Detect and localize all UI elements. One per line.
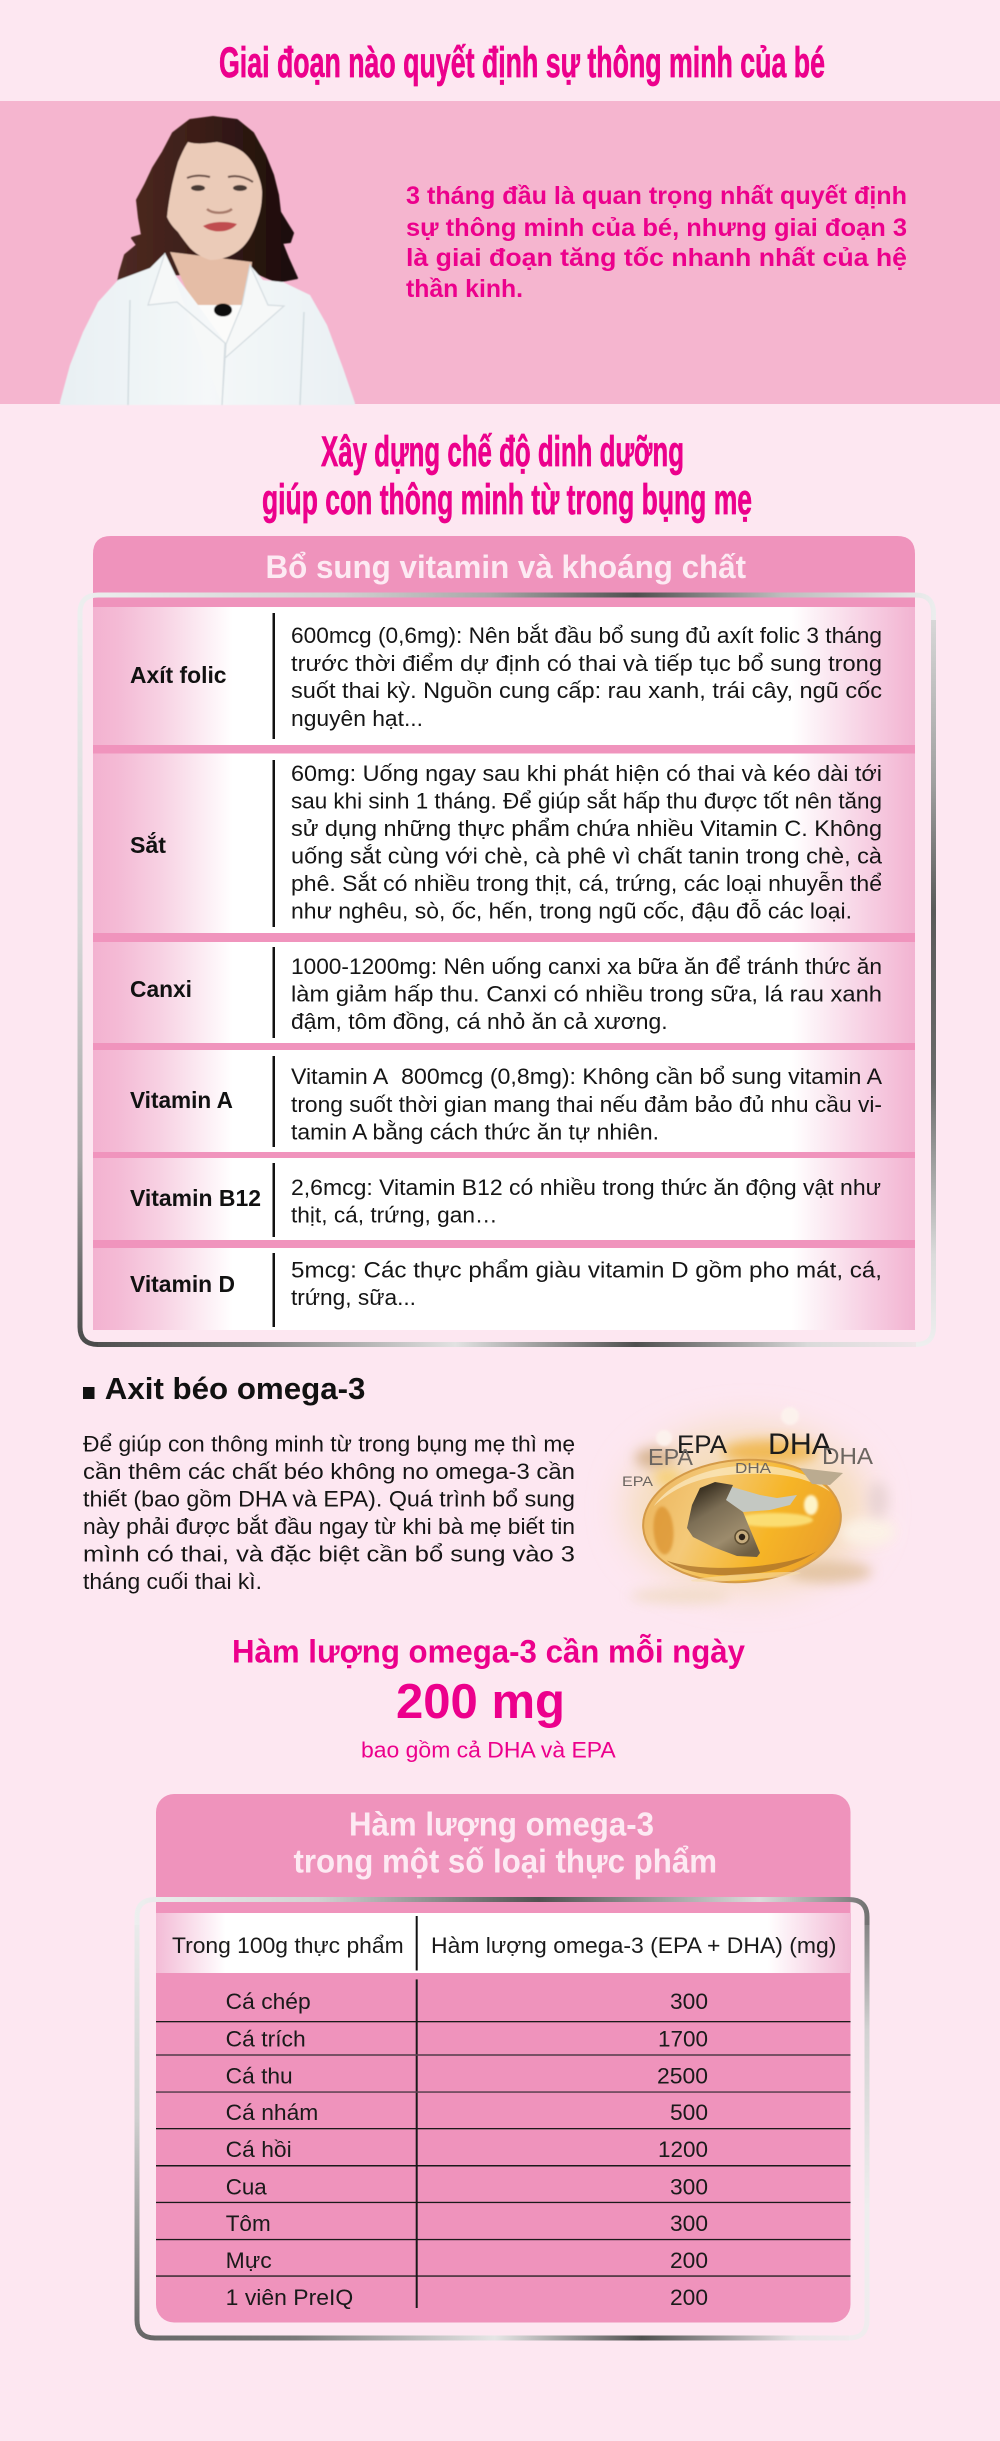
bullet square <box>83 1387 94 1399</box>
image: fish oil capsule with EPA and DHA: DHA <box>735 1460 771 1477</box>
row: Cá nhám <box>226 2100 708 2125</box>
table rows background <box>93 607 915 1330</box>
row: Axít folic: suốt thai kỳ. Nguồn cung cấp: rau xanh, trái cây, ngũ cốc <box>291 678 882 703</box>
photo: doctor in white coat <box>60 117 355 405</box>
row: Sắt: phê. Sắt có nhiều trong thịt, cá, trứng, các loại nhuyễn thể <box>291 871 882 896</box>
row: Canxi: đậm, tôm đồng, cá nhỏ ăn cả xương. <box>291 1009 668 1034</box>
row: Vitamin B12: 2,6mcg: Vitamin B12 có nhiều trong thức ăn động vật như <box>291 1175 881 1200</box>
row: Canxi: 1000-1200mg: Nên uống canxi xa bữa ăn để tránh thức ăn <box>291 954 882 979</box>
image: fish oil capsule with EPA and DHA <box>622 1407 896 1604</box>
table card and title <box>156 1794 850 2322</box>
callout: daily omega-3 requirement <box>232 1634 745 1763</box>
row: Vitamin A: tamin A bằng cách thức ăn tự nhiên. <box>291 1120 659 1145</box>
row: Canxi: Canxi <box>130 976 192 1002</box>
row: 1 viên PreIQ <box>226 2285 708 2310</box>
table column header <box>156 1913 851 1973</box>
row: Mực: 200 <box>670 2248 708 2273</box>
row: Vitamin D: Vitamin D <box>130 1271 235 1297</box>
omega paragraph <box>83 1432 575 1594</box>
row: Vitamin A: Vitamin A 800mcg (0,8mg): Không cần bổ sung vitamin A <box>291 1064 882 1089</box>
row: Cá thu <box>226 2064 708 2088</box>
row: Axít folic: 600mcg (0,6mg): Nên bắt đầu bổ sung đủ axít folic 3 tháng <box>291 623 882 648</box>
callout: daily omega-3 requirement: Hàm lượng omega-3 cần mỗi ngày <box>232 1634 745 1670</box>
omega paragraph: mình có thai, và đặc biệt cần bổ sung vào 3 <box>83 1542 575 1567</box>
omega paragraph: tháng cuối thai kì. <box>83 1569 262 1594</box>
row: Sắt: như nghêu, sò, ốc, hến, trong ngũ cốc, đậu đỗ các loại. <box>291 899 852 924</box>
callout: daily omega-3 requirement: bao gồm cả DHA và EPA <box>361 1738 616 1763</box>
row: Cá hồi: Cá hồi <box>226 2137 292 2162</box>
row: Cá thu: 2500 <box>657 2064 708 2088</box>
row: Vitamin B12: Vitamin B12 <box>130 1185 261 1211</box>
section: omega-3 fatty acid <box>83 1371 896 1604</box>
row: Sắt: uống sắt cùng với chè, cà phê vì chất tanin trong chè, cà <box>291 844 883 869</box>
image: fish oil capsule with EPA and DHA: EPA <box>622 1473 654 1489</box>
image: fish oil capsule with EPA and DHA: DHA <box>768 1428 832 1461</box>
quote text: sự thông minh của bé, nhưng giai đoạn 3 <box>406 214 907 242</box>
row: Cá trích: 1700 <box>658 2026 708 2051</box>
row: Sắt: Sắt <box>130 831 166 858</box>
image: fish oil capsule with EPA and DHA: EPA <box>648 1444 694 1470</box>
panel: vitamins and minerals table <box>80 536 934 1344</box>
row: Vitamin A: Vitamin A <box>130 1087 233 1113</box>
row: Cá chép <box>226 1989 708 2014</box>
table column header: Hàm lượng omega-3 (EPA + DHA) (mg) <box>431 1933 836 1958</box>
row: 1 viên PreIQ: 200 <box>670 2285 708 2310</box>
row: Axít folic: Axít folic <box>130 662 227 688</box>
table card and title: Hàm lượng omega-3 <box>349 1806 654 1843</box>
row: Cá hồi: 1200 <box>658 2137 708 2162</box>
row: Cá trích: Cá trích <box>226 2026 306 2051</box>
row: Sắt: sau khi sinh 1 tháng. Để giúp sắt hấp thu được tốt nên tăng <box>291 789 882 814</box>
row: Cua: Cua <box>226 2174 267 2199</box>
row: Vitamin D <box>130 1253 882 1327</box>
row: Vitamin D: 5mcg: Các thực phẩm giàu vitamin D gồm pho mát, cá, <box>291 1258 882 1283</box>
heading: nutrition plan <box>262 428 752 524</box>
table header: Bổ sung vitamin và khoáng chất <box>266 549 746 585</box>
omega paragraph: cần thêm các chất béo không no omega-3 cần <box>83 1459 575 1484</box>
row: Cua: 300 <box>670 2174 708 2199</box>
callout: daily omega-3 requirement: 200 mg <box>396 1675 565 1729</box>
silver frame around vitamins table <box>80 595 934 1344</box>
row: 1 viên PreIQ: 1 viên PreIQ <box>226 2285 353 2310</box>
row: Cua <box>226 2174 708 2199</box>
panel: doctor quote band <box>0 101 1000 405</box>
image: fish oil capsule with EPA and DHA: EPA <box>677 1431 727 1459</box>
row: Canxi: làm giảm hấp thu. Canxi có nhiều trong sữa, lá rau xanh <box>291 982 882 1007</box>
row: Cá hồi <box>226 2137 708 2162</box>
row: Vitamin A: trong suốt thời gian mang thai nếu đảm bảo đủ nhu cầu vi- <box>291 1092 882 1117</box>
quote text: 3 tháng đầu là quan trọng nhất quyết định <box>406 182 907 210</box>
table column header: Trong 100g thực phẩm <box>172 1933 404 1958</box>
omega heading: Axit béo omega-3 <box>105 1371 365 1406</box>
omega paragraph: này phải được bắt đầu ngay từ khi bà mẹ biết tin <box>83 1514 575 1539</box>
row: Tôm: Tôm <box>226 2211 271 2236</box>
row: Vitamin B12: thịt, cá, trứng, gan… <box>291 1203 498 1228</box>
silver frame around omega table <box>137 1900 867 2338</box>
quote text: thần kinh. <box>406 275 523 303</box>
row: Axít folic: trước thời điểm dự định có thai và tiếp tục bổ sung trong <box>291 651 882 676</box>
row: Cá nhám: 500 <box>670 2100 708 2125</box>
quote text <box>406 182 907 303</box>
table card and title: trong một số loại thực phẩm <box>294 1843 717 1880</box>
row: Tôm: 300 <box>670 2211 708 2236</box>
omega paragraph: Để giúp con thông minh từ trong bụng mẹ thì mẹ <box>83 1432 575 1457</box>
row: Sắt: sử dụng những thực phẩm chứa nhiều Vitamin C. Không <box>291 816 882 841</box>
omega paragraph: thiết (bao gồm DHA và EPA). Quá trình bổ sung <box>83 1487 575 1512</box>
row: Axít folic: nguyên hạt... <box>291 706 423 731</box>
row: Canxi <box>130 947 882 1038</box>
row: Vitamin A <box>130 1056 882 1147</box>
row: Sắt <box>130 760 883 927</box>
row: Tôm <box>226 2211 708 2236</box>
row: Cá thu: Cá thu <box>226 2064 293 2088</box>
row: Cá nhám: Cá nhám <box>226 2100 318 2125</box>
table header <box>93 536 915 607</box>
row: Vitamin B12 <box>130 1163 881 1237</box>
table grid lines <box>156 1979 850 2308</box>
row: Mực: Mực <box>226 2248 272 2273</box>
row: Cá trích <box>226 2026 708 2051</box>
row: Vitamin D: trứng, sữa... <box>291 1285 416 1310</box>
row: Cá chép: Cá chép <box>226 1989 311 2014</box>
panel: omega-3 content table <box>137 1794 867 2338</box>
row: Mực <box>226 2248 708 2273</box>
quote text: là giai đoạn tăng tốc nhanh nhất của hệ <box>406 244 907 272</box>
row: Sắt: 60mg: Uống ngay sau khi phát hiện có thai và kéo dài tới <box>291 761 882 786</box>
row: Cá chép: 300 <box>670 1989 708 2014</box>
row: Axít folic <box>130 613 882 739</box>
image: fish oil capsule with EPA and DHA: DHA <box>822 1443 874 1469</box>
heading: nutrition plan: Xây dựng chế độ dinh dưỡng <box>321 428 684 476</box>
